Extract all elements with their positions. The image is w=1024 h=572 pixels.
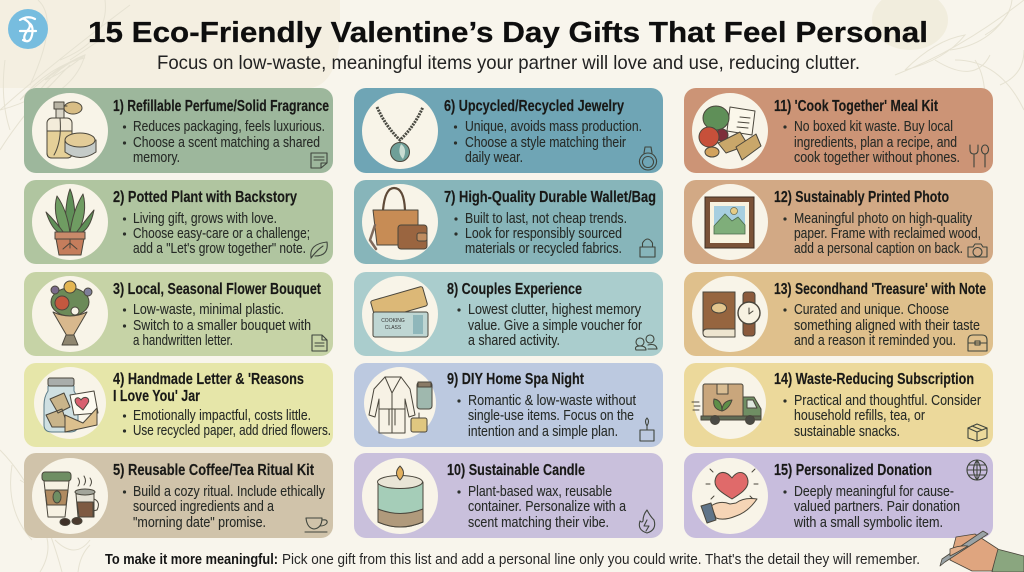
icon: candle [640, 418, 654, 441]
bullets: daily wear. [465, 149, 523, 166]
icon: leaf [311, 242, 327, 258]
bullet: household refills, tea, or [794, 407, 925, 424]
bullet [123, 483, 325, 531]
bullet: with a small symbolic item. [793, 514, 943, 531]
bullet: paper. Frame with reclaimed wood, [794, 225, 981, 242]
icon: teacup [305, 518, 327, 532]
icon: ingredients and recipe [699, 106, 761, 160]
card 6: jewelry [354, 88, 663, 173]
bullet [783, 483, 960, 531]
icon: document [312, 335, 327, 351]
bullets: Choose a scent matching a shared [133, 134, 320, 151]
bullet: Plant-based wax, reusable [468, 483, 612, 500]
bullets: Switch to a smaller bouquet with [133, 317, 311, 334]
card 3: bouquet [24, 272, 333, 356]
bullet [457, 483, 627, 531]
card 7: wallet and bag [354, 180, 663, 264]
icon: jar and envelope [44, 378, 98, 432]
bullet: cook together without phones. [794, 149, 960, 166]
bullets: memory. [133, 149, 180, 166]
bullet: single-use items. Focus on the [468, 407, 634, 424]
card 8: couples experience [354, 272, 663, 356]
bullet [783, 118, 960, 166]
card 15: donation [684, 453, 993, 538]
icon: heart in hand [701, 469, 758, 523]
icon: globe [967, 460, 987, 480]
icon: lock [640, 239, 655, 257]
bullets: materials or recycled fabrics. [465, 240, 622, 257]
icon: box [968, 424, 987, 441]
bullet: sustainable snacks. [794, 423, 900, 440]
heading line 2: I Love You' Jar [113, 388, 200, 405]
icon: camera [968, 244, 987, 257]
bullets: Emotionally impactful, costs little. [133, 407, 311, 424]
card 4: letter jar [24, 363, 333, 447]
icon: chest [968, 335, 987, 351]
footer note: Pick one gift from this list and add a personal line only you could write. That's the detail they will remember. [282, 551, 920, 568]
heading: 9) DIY Home Spa Night [447, 371, 584, 388]
heading: 4) Handmade Letter & 'Reasons [113, 371, 304, 388]
bullet: add a personal caption on back. [794, 240, 963, 257]
icon: people [636, 335, 657, 350]
bullet [783, 301, 980, 349]
bullet: Build a cozy ritual. Include ethically [133, 483, 325, 500]
icon: candle jar [378, 466, 423, 527]
icon: ring [640, 147, 657, 170]
bullets: Choose easy-care or a challenge; [133, 225, 310, 242]
bullet: Romantic & low-waste without [468, 392, 637, 409]
bullets: Living gift, grows with love. [133, 210, 277, 227]
heading: 11) 'Cook Together' Meal Kit [774, 98, 938, 115]
bullet: intention and a simple plan. [468, 423, 618, 440]
bullet: Meaningful photo on high-quality [794, 210, 972, 227]
icon: perfume and solid fragrance [47, 102, 96, 158]
card 11: meal kit [684, 88, 993, 173]
illustration: hand with pen [940, 531, 1024, 572]
bullets: Built to last, not cheap trends. [465, 210, 627, 227]
subtitle: Focus on low-waste, meaningful items your partner will love and use, reducing clutter. [157, 52, 860, 74]
bullets [123, 118, 325, 166]
bullets [123, 407, 331, 439]
bullets: a handwritten letter. [133, 332, 233, 349]
icon: flame [639, 510, 655, 533]
bullets: Low-waste, minimal plastic. [133, 301, 284, 318]
card 1: perfume [24, 88, 333, 173]
heading: 5) Reusable Coffee/Tea Ritual Kit [113, 462, 314, 479]
bullet: scent matching their vibe. [468, 514, 609, 531]
card 14: subscription [684, 363, 993, 447]
heading: 3) Local, Seasonal Flower Bouquet [113, 281, 321, 298]
heading: 2) Potted Plant with Backstory [113, 189, 297, 206]
title: 15 Eco-Friendly Valentine’s Day Gifts That Feel Personal [88, 17, 928, 49]
bullets: Reduces packaging, feels luxurious. [133, 118, 325, 135]
bullet: Lowest clutter, highest memory [468, 301, 641, 318]
icon: necklace [377, 107, 423, 162]
bullet: Deeply meaningful for cause- [794, 483, 954, 500]
bullet: Curated and unique. Choose [794, 301, 949, 318]
bullets: Look for responsibly sourced [465, 225, 622, 242]
icon: robe, jar, candle [369, 377, 432, 433]
bullets: Use recycled paper, add dried flowers. [133, 422, 331, 439]
icon: note [311, 153, 327, 168]
bullet: valued partners. Pair donation [794, 498, 960, 515]
logo [8, 9, 48, 49]
bullets: Unique, avoids mass production. [465, 118, 642, 135]
bullet [783, 210, 981, 257]
icon: fork and spoon [970, 145, 989, 167]
card 12: photo [684, 180, 993, 264]
bullet: container. Personalize with a [468, 498, 627, 515]
bullet: a shared activity. [468, 332, 560, 349]
bullet [783, 392, 981, 440]
bullets: Choose a style matching their [465, 134, 626, 151]
heading: 1) Refillable Perfume/Solid Fragrance [113, 98, 329, 115]
card 9: spa night [354, 363, 663, 447]
bullet: and a reason it reminded you. [794, 332, 956, 349]
icon: framed photo [705, 197, 754, 248]
bullets [123, 301, 311, 349]
icon: delivery truck [692, 384, 761, 424]
icon: coffee cups and beans [42, 472, 98, 526]
card 2: plant [24, 180, 333, 264]
heading: 8) Couples Experience [447, 281, 582, 298]
bullets [123, 210, 310, 257]
icon: potted plant [46, 189, 94, 255]
bullet: something aligned with their taste [794, 317, 980, 334]
bullet: "morning date" promise. [133, 514, 266, 531]
footer note: To make it more meaningful: [105, 551, 278, 568]
bullets: add a "Let's grow together" note. [133, 240, 306, 257]
heading: 10) Sustainable Candle [447, 462, 585, 479]
card 5: coffee kit [24, 453, 333, 538]
heading: 14) Waste-Reducing Subscription [774, 371, 974, 388]
card 10: candle [354, 453, 663, 538]
bullet: Practical and thoughtful. Consider [794, 392, 981, 409]
heading: 12) Sustainably Printed Photo [774, 189, 949, 206]
bullet [457, 392, 637, 440]
heading: 15) Personalized Donation [774, 462, 932, 479]
bullets [454, 210, 627, 257]
bullet [457, 301, 642, 349]
icon: flower bouquet [51, 281, 92, 345]
heading: 6) Upcycled/Recycled Jewelry [444, 98, 624, 115]
icon: tickets [370, 286, 428, 337]
icon: tickets: COOKING [381, 318, 405, 324]
icon: book and watch [703, 292, 760, 337]
bullet: ingredients, plan a recipe, and [794, 134, 957, 151]
bullet: value. Give a simple voucher for [468, 317, 642, 334]
card 13: treasure [684, 272, 993, 356]
bullet: No boxed kit waste. Buy local [794, 118, 953, 135]
icon: bag and wallet [370, 188, 427, 249]
bullet: sourced ingredients and a [133, 498, 275, 515]
icon: tickets: CLASS [385, 325, 402, 331]
heading: 7) High-Quality Durable Wallet/Bag [444, 189, 656, 206]
bullets [454, 118, 642, 166]
